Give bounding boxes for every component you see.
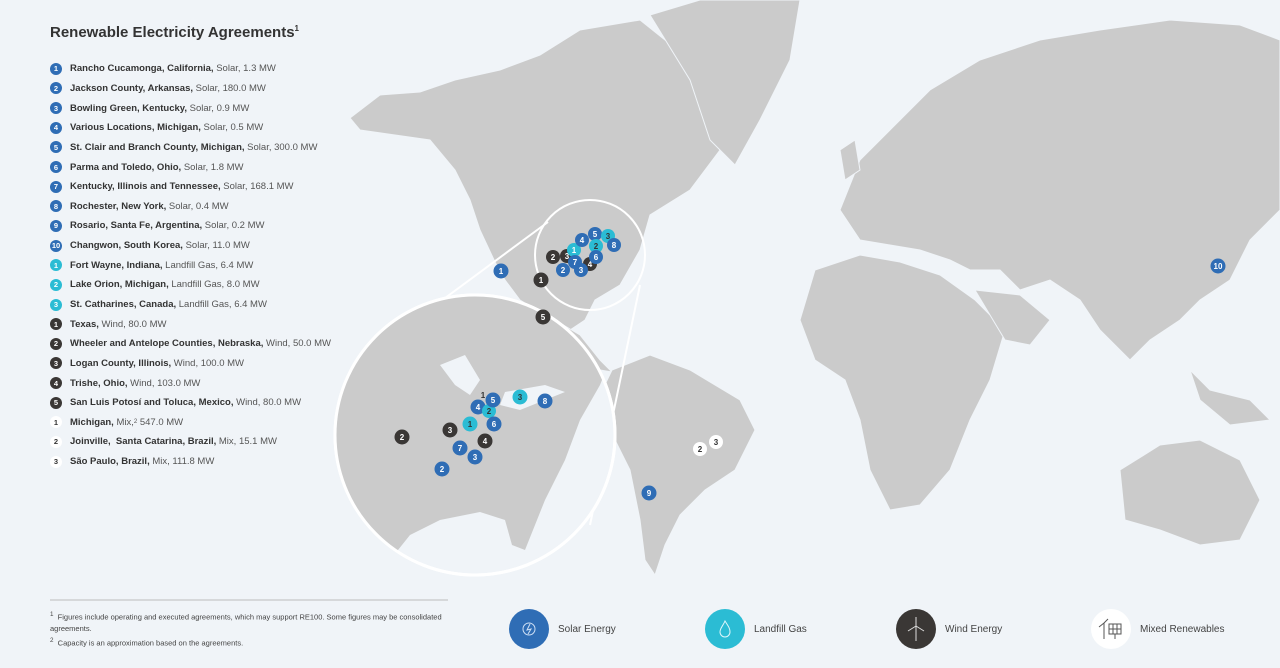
agreements list: 10 [52, 241, 60, 250]
markers: 1 [499, 267, 504, 276]
agreements list: Wind, 100.0 MW [174, 358, 244, 369]
agreements list: Mix, 111.8 MW [152, 456, 214, 467]
markers: 3 [579, 266, 584, 275]
agreements list: 9 [54, 221, 58, 230]
agreements list: Solar, 1.8 MW [184, 162, 244, 173]
agreements list: Michigan, [70, 417, 114, 428]
agreements list: Wind, 103.0 MW [130, 378, 200, 389]
agreements list: Landfill Gas, 6.4 MW [179, 299, 267, 310]
title: Renewable Electricity Agreements1 [50, 24, 299, 41]
markers: 5 [593, 230, 598, 239]
markers: 2 [487, 407, 492, 416]
agreements list: Texas, [70, 319, 99, 330]
agreements list: 4 [54, 123, 58, 132]
markers: 1 [539, 276, 544, 285]
agreements list: 2 [54, 84, 58, 93]
markers: 5 [541, 313, 546, 322]
agreements list: Changwon, South Korea, [70, 240, 183, 251]
agreements list: Solar, 168.1 MW [223, 181, 294, 192]
agreements list: 2 [54, 280, 58, 289]
agreements list: 1 [54, 320, 58, 329]
agreements list: 1 [54, 261, 58, 270]
Greenland [650, 0, 800, 165]
markers: 4 [588, 260, 593, 269]
markers: 9 [647, 489, 652, 498]
footnotes: 1 Figures include operating and executed agreements, which may support RE100. Some figures may be consolidated agreements. [50, 611, 442, 633]
legend: wind: Wind Energy [945, 624, 1002, 634]
agreements list: Wind, 80.0 MW [102, 319, 166, 330]
markers: 2 [400, 433, 405, 442]
legend: landfill [705, 609, 807, 649]
agreements list: Mix, 15.1 MW [219, 436, 277, 447]
agreements list: 8 [54, 202, 58, 211]
legend: solar: Solar Energy [558, 624, 616, 634]
agreements list: Solar, 0.2 MW [205, 220, 264, 231]
legend: mixed: Mixed Renewables [1140, 624, 1224, 634]
agreements list: 2 [134, 419, 137, 425]
agreements list: Solar, 300.0 MW [247, 142, 317, 153]
agreements list: 4 [54, 379, 58, 388]
markers: 7 [458, 444, 463, 453]
markers: 2 [561, 266, 566, 275]
agreements list: 6 [54, 163, 58, 172]
agreements list: Mix, 547.0 MW [116, 417, 183, 428]
markers: 5 [491, 396, 496, 405]
legend: mixed [1091, 609, 1224, 649]
agreements list: 5 [54, 398, 58, 407]
zoom connector lines [395, 222, 640, 525]
agreements list: 5 [54, 143, 58, 152]
agreements list: Landfill Gas, 8.0 MW [171, 279, 260, 290]
markers [394, 227, 1226, 500]
agreements list: St. Clair and Branch County, Michigan, [70, 142, 245, 153]
agreements list: Fort Wayne, Indiana, [70, 260, 163, 271]
agreements list: Solar, 0.5 MW [204, 122, 263, 133]
agreements list: Wind, 80.0 MW [236, 397, 301, 408]
agreements list: Wind, 50.0 MW [266, 338, 331, 349]
agreements list: Joinville, Santa Catarina, Brazil, [70, 436, 216, 447]
markers: 3 [565, 252, 570, 261]
markers: 4 [483, 437, 488, 446]
agreements list: Solar, 1.3 MW [216, 63, 276, 74]
footnotes: 2 Capacity is an approximation based on the agreements. [50, 636, 243, 647]
agreements list: Logan County, Illinois, [70, 358, 171, 369]
agreements list: 3 [54, 300, 58, 309]
agreements list: Rosario, Santa Fe, Argentina, [70, 220, 202, 231]
agreements list: Trishe, Ohio, [70, 378, 128, 389]
agreements list: 3 [54, 457, 58, 466]
markers: 3 [518, 393, 523, 402]
Europe/Asia [840, 20, 1280, 360]
Arabia [975, 290, 1050, 345]
agreements list: 2 [54, 437, 58, 446]
agreements list: 2 [54, 339, 58, 348]
markers: 2 [440, 465, 445, 474]
markers: 6 [492, 420, 497, 429]
UK [840, 140, 860, 180]
South America [600, 355, 755, 575]
Australia [1120, 440, 1260, 545]
agreements list: Solar, 11.0 MW [186, 240, 250, 251]
markers: 3 [448, 426, 453, 435]
footnotes [50, 611, 442, 647]
markers: 2 [551, 253, 556, 262]
markers: 4 [476, 403, 481, 412]
agreements list: Lake Orion, Michigan, [70, 279, 169, 290]
markers: 8 [612, 241, 617, 250]
legend: landfill: Landfill Gas [754, 624, 807, 634]
Africa [800, 255, 1005, 510]
markers: 6 [594, 253, 599, 262]
markers: 2 [594, 242, 599, 251]
agreements list: Rochester, New York, [70, 201, 166, 212]
markers: 4 [580, 236, 585, 245]
markers: 3 [714, 438, 719, 447]
markers: 10 [1214, 262, 1223, 271]
markers: 8 [543, 397, 548, 406]
agreements list: 1 [54, 64, 58, 73]
agreements list: Rancho Cucamonga, California, [70, 63, 214, 74]
markers: 1 [572, 246, 577, 255]
agreements list: St. Catharines, Canada, [70, 299, 176, 310]
markers: 1 [468, 420, 473, 429]
agreements list: Wheeler and Antelope Counties, Nebraska, [70, 338, 263, 349]
North America [350, 20, 720, 330]
markers: 2 [698, 445, 703, 454]
agreements list: 1 [54, 418, 58, 427]
agreements list: Solar, 0.4 MW [169, 201, 229, 212]
agreements list: Solar, 180.0 MW [196, 83, 266, 94]
agreements list: San Luis Potosí and Toluca, Mexico, [70, 397, 233, 408]
markers: 3 [473, 453, 478, 462]
agreements list [50, 63, 331, 468]
agreements list: Solar, 0.9 MW [190, 103, 249, 114]
agreements list: Various Locations, Michigan, [70, 122, 201, 133]
agreements list: 7 [54, 182, 58, 191]
agreements list: Parma and Toledo, Ohio, [70, 162, 181, 173]
agreements list: Kentucky, Illinois and Tennessee, [70, 181, 221, 192]
legend: wind [896, 609, 1002, 649]
agreements list: Bowling Green, Kentucky, [70, 103, 187, 114]
agreements list: São Paulo, Brazil, [70, 456, 150, 467]
small zoom circle [535, 200, 645, 310]
agreements list: Landfill Gas, 6.4 MW [165, 260, 253, 271]
inset zoom circle [334, 294, 616, 576]
markers: 3 [606, 232, 611, 241]
agreements list: 3 [54, 359, 58, 368]
markers: 7 [573, 258, 578, 267]
legend: solar [509, 609, 616, 649]
markers: 1 [481, 391, 486, 400]
agreements list: 3 [54, 104, 58, 113]
agreements list: Jackson County, Arkansas, [70, 83, 193, 94]
